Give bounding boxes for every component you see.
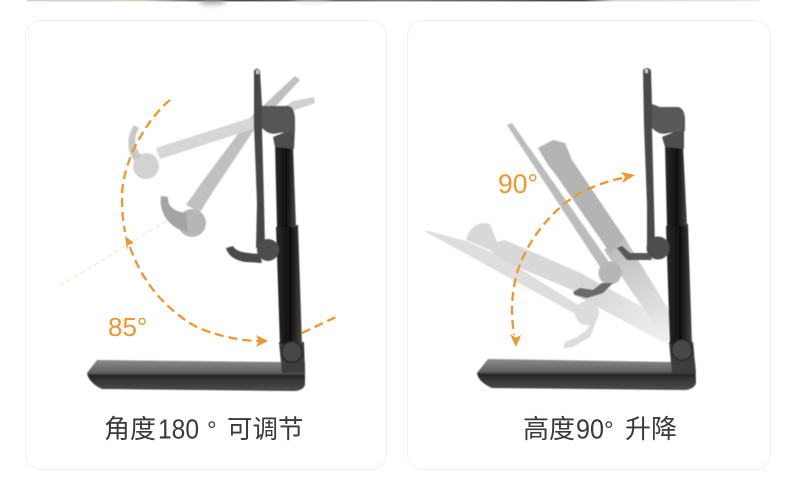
label: 90 degrees: 90° — [498, 169, 538, 199]
column collar — [273, 128, 295, 149]
caption: angle: 角度 — [104, 414, 156, 444]
upper column — [275, 145, 296, 227]
bottom hook — [617, 246, 652, 260]
tablet plate — [254, 69, 265, 248]
panel: height adjustment — [408, 20, 770, 470]
ghost position: lowest holder — [424, 223, 670, 348]
hinge bracket — [279, 342, 305, 373]
arrowhead: top right — [621, 172, 635, 183]
column collar — [662, 128, 684, 149]
hinge bracket — [669, 342, 696, 373]
ghost position: middle holder — [507, 123, 670, 343]
caption: height: 高度 — [523, 414, 575, 444]
caption: height — [523, 414, 677, 444]
head joint — [262, 106, 295, 134]
stand: left upright — [87, 69, 305, 391]
caption: angle — [104, 414, 304, 444]
panel card: right — [408, 20, 770, 470]
lower column — [666, 224, 692, 344]
bottom hook — [226, 246, 262, 263]
orange arc arrow: height range — [512, 178, 622, 335]
ghost position: upper tilted holder — [128, 76, 315, 237]
caption: angle: 可调节 — [227, 416, 304, 444]
panel card: left — [26, 20, 386, 470]
upper column — [665, 145, 687, 226]
base hinge knob — [672, 340, 692, 360]
panel: angle adjustment — [26, 20, 386, 470]
tablet plate — [643, 68, 655, 248]
caption: angle: 180 — [158, 414, 199, 444]
orange arc arrow: tilt range — [122, 100, 336, 341]
top edge strip — [27, 0, 760, 4]
base — [477, 359, 696, 390]
stand: right upright — [477, 68, 696, 390]
caption: angle: ° — [207, 417, 217, 444]
base — [87, 360, 305, 391]
lower column — [276, 225, 302, 344]
pivot — [257, 239, 279, 261]
caption: height: ° — [604, 417, 614, 444]
caption: height: 升降 — [625, 414, 677, 444]
base hinge knob — [282, 342, 302, 362]
arrowhead: right — [256, 335, 268, 347]
pale dashed guide line — [60, 220, 168, 286]
arrowhead: down — [510, 334, 521, 347]
caption: height: 90 — [576, 414, 604, 444]
arrowhead: up — [125, 236, 134, 250]
label: 85 degrees: 85° — [108, 312, 147, 342]
head joint — [652, 104, 685, 134]
pivot — [646, 236, 670, 260]
